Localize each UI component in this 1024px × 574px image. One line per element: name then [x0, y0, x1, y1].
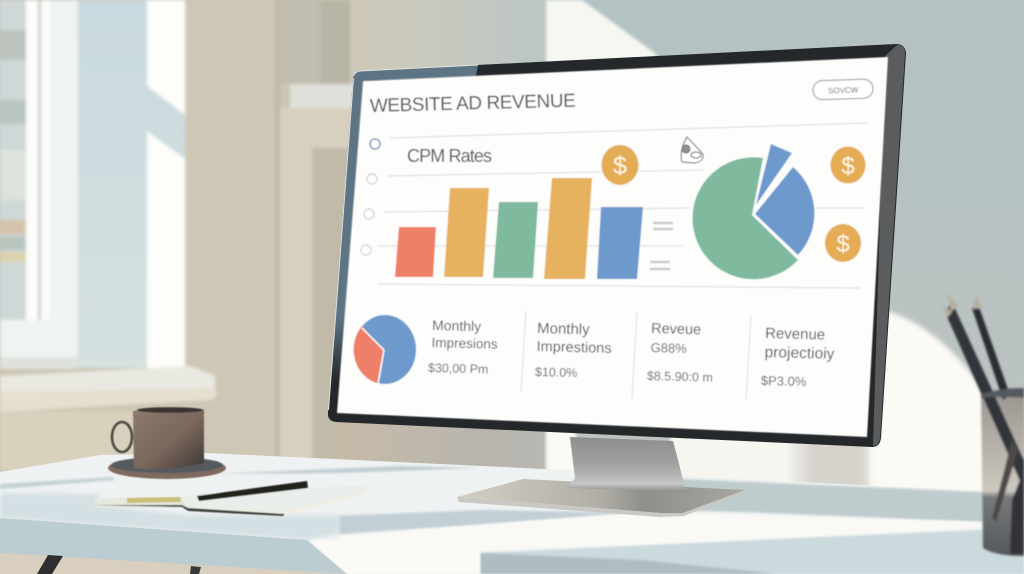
below monitor wall: [340, 415, 546, 475]
monitor stand: [457, 437, 746, 517]
sunlight wedge on wall: [546, 0, 656, 70]
stat: revenue growth: $8.5.90:0 m: [647, 369, 713, 385]
icon: small gray glyph: [681, 137, 703, 163]
floor under desk: [0, 553, 347, 574]
icon: dollar coin: [602, 145, 638, 185]
review button: [813, 79, 873, 100]
stat: revenue projection: projectioiy: [764, 344, 835, 363]
icon: dollar coin: $: [841, 153, 855, 180]
desk: [0, 453, 1024, 574]
wall: right side: [545, 0, 1024, 500]
lower blue right: [485, 528, 1024, 574]
monitor bezel: [328, 44, 906, 447]
stat: revenue growth: G88%: [650, 340, 687, 356]
window sill: [0, 366, 215, 392]
stat: revenue growth: [647, 321, 714, 385]
wall: back wall above monitor: [350, 0, 550, 300]
window view: [0, 0, 26, 322]
wall reveal: pale blue: [78, 0, 186, 368]
neck: [567, 437, 692, 492]
stat: revenue projection: Revenue: [765, 325, 825, 344]
stat: monthly impressions 2: Monthly: [537, 320, 590, 338]
icon: dollar coin: $: [613, 152, 627, 180]
title: WEBSITE AD REVENUE: [370, 91, 576, 117]
review button: SOVCW: [828, 85, 859, 95]
stat: monthly impressions 1: Impresions: [431, 335, 498, 352]
desk shadow band behind monitor: [660, 478, 1024, 524]
notebook and pen: [91, 481, 367, 516]
blue shade: centre stripe: [340, 510, 660, 534]
stat: revenue projection: $P3.0%: [761, 373, 807, 389]
stat: monthly impressions 2: $10.0%: [535, 365, 578, 380]
icon: dollar coin: [830, 146, 866, 184]
stat: monthly impressions 2: Imprestions: [536, 339, 612, 357]
wall beige column: [185, 0, 275, 460]
desk front face: [0, 518, 347, 574]
stat: revenue growth: Reveue: [651, 321, 701, 338]
stat: monthly impressions 1: [428, 317, 499, 377]
bar chart: CPM rates: [395, 178, 643, 279]
desk legs: [37, 555, 63, 574]
monitor screen: [337, 57, 888, 437]
white sunlit strip: [340, 512, 1020, 556]
base: [457, 479, 745, 513]
sunlight patch right: [870, 312, 985, 495]
pie chart: revenue share: [693, 144, 814, 279]
dividers: [521, 311, 751, 400]
upper sill: [290, 84, 360, 108]
stat: monthly impressions 1: Monthly: [432, 317, 481, 334]
icon: dollar coin: $: [836, 231, 850, 258]
pencil holder with pencils: [943, 293, 1024, 556]
cast shadow stripes: [0, 477, 115, 489]
coffee cup and saucer: [108, 407, 226, 479]
cabinet: [280, 108, 360, 460]
stat: monthly impressions 2: [535, 320, 612, 381]
small pie chart: [354, 315, 416, 384]
stat: monthly impressions 1: $30,00 Pm: [428, 361, 489, 376]
legend dashes: [650, 223, 673, 269]
stat: revenue projection: [761, 325, 835, 390]
bright light strips: [147, 0, 185, 115]
blue shade: left surface: [0, 493, 420, 540]
legend markers: [361, 139, 380, 255]
icon: dollar coin: [825, 224, 861, 262]
window frame: [0, 0, 78, 360]
grid lines: [378, 123, 868, 288]
heading: CPM Rates: CPM Rates: [407, 146, 492, 166]
